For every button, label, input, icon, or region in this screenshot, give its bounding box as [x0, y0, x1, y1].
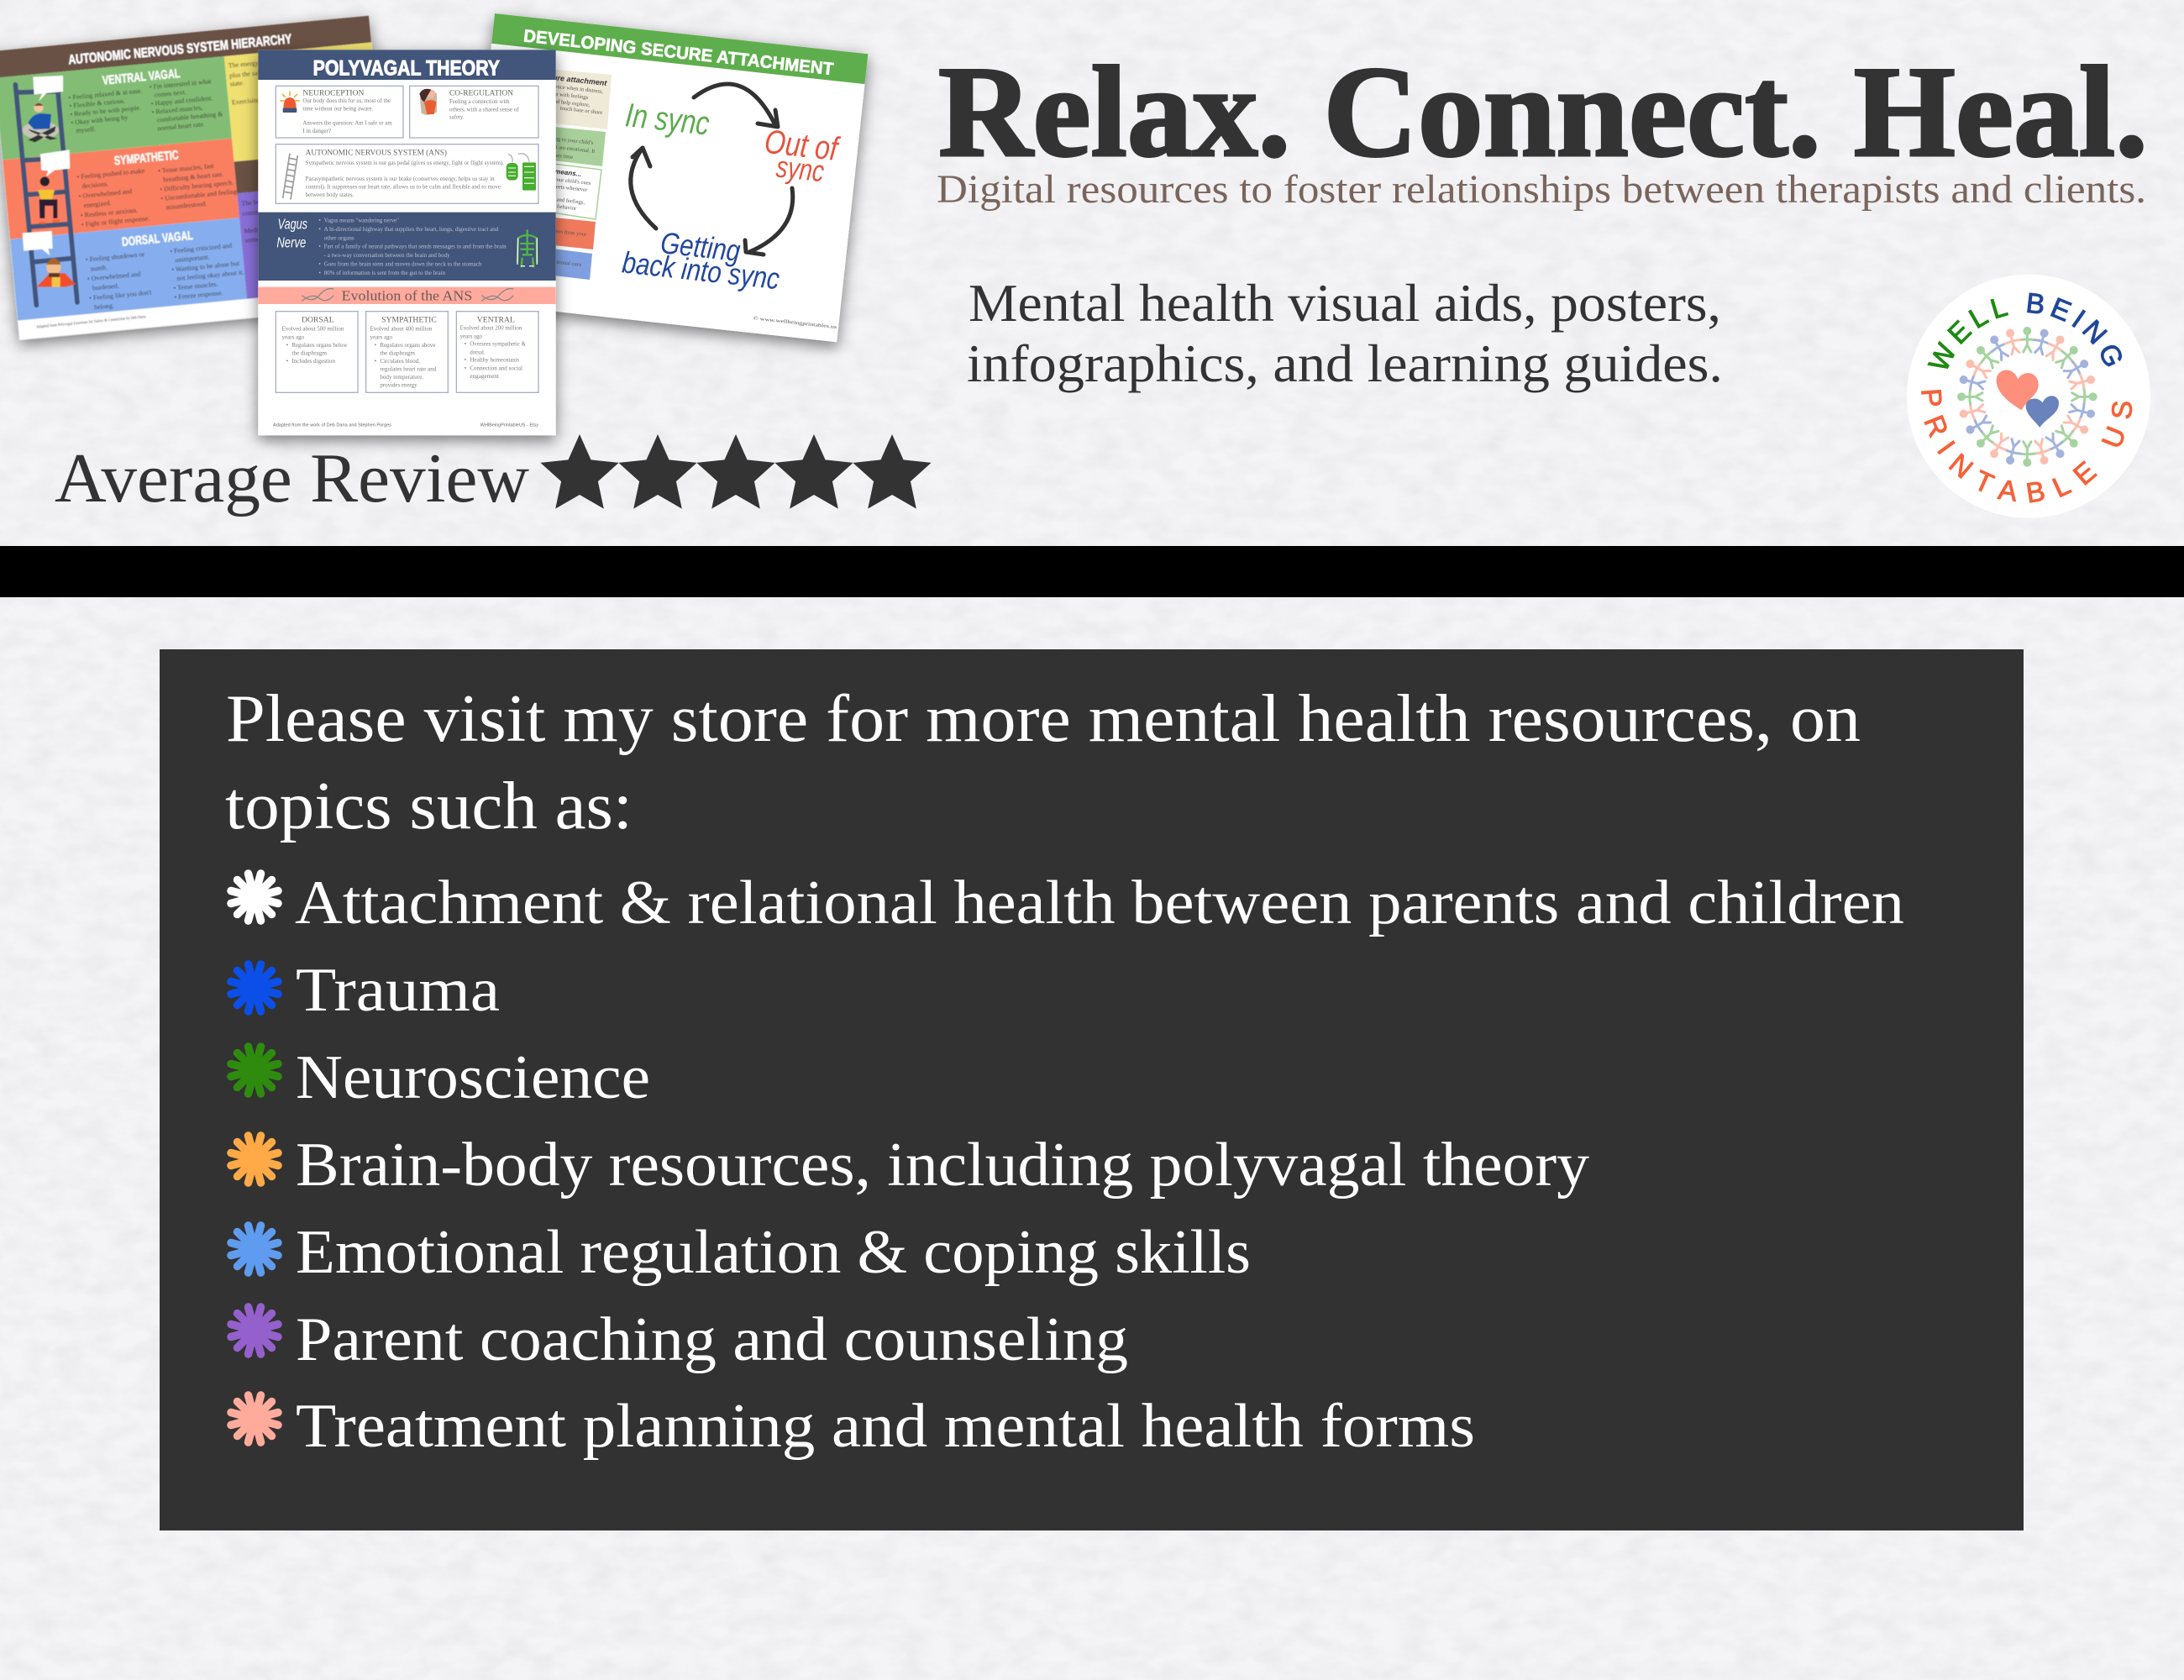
side boxes: Seeing your child's cues [538, 175, 591, 186]
ventral box: VENTRAL [477, 315, 515, 324]
poster: autonomic nervous system hierarchy: • Happy and confident. [150, 94, 213, 108]
side boxes: needs and feelings, [543, 196, 585, 206]
poster: autonomic nervous system hierarchy [0, 16, 396, 339]
vagus nerve band: A bi-directional highway that supplies the heart, lungs, digestive tract and [324, 225, 499, 233]
sympathetic box: Regulates organs above [380, 341, 435, 349]
poster: developing secure attachment: © www.wellbeingprintables.us [753, 315, 837, 330]
vagus nerve band: other organs [324, 234, 354, 241]
topic: treatment planning: Treatment planning and mental health forms [296, 1392, 1475, 1461]
topic: attachment: Attachment & relational health between parents and children [295, 869, 1904, 937]
hearts [1997, 370, 2059, 428]
autonomic nervous system box [276, 144, 538, 203]
side boxes: responding to your child's [536, 134, 594, 146]
poster: autonomic nervous system hierarchy: energized. [83, 199, 112, 209]
average review label: Average Review [55, 439, 529, 517]
neuroception box: time without our being aware. [302, 105, 373, 113]
poster: autonomic nervous system hierarchy: • Overwhelmed and [87, 270, 141, 283]
vagus nerve band: Vagus means "wandering nerve" [324, 216, 399, 223]
poster: autonomic nervous system hierarchy: plus the safety of a [229, 67, 281, 80]
side boxes: help with feelings [549, 91, 589, 101]
description: infographics, and learning guides. [967, 333, 1723, 393]
side boxes: their behavior [545, 202, 577, 212]
poster header [258, 50, 556, 80]
co-regulation box: Feeling a connection with [449, 97, 510, 105]
subtitle: Digital resources to foster relationships between therapists and clients. [937, 167, 2146, 212]
panel intro text: Please visit my store for more mental health resources, on [226, 682, 1861, 756]
poster: autonomic nervous system hierarchy: comfortable breathing & [156, 110, 224, 123]
poster: autonomic nervous system hierarchy: SYMPATHETIC [113, 148, 180, 168]
dorsal box: Includes digestion [291, 357, 335, 365]
panel intro text [225, 682, 1861, 843]
poster: autonomic nervous system hierarchy: • Overwhelmed and [78, 187, 133, 200]
poster: autonomic nervous system hierarchy: • Feeling pushed to make [76, 167, 145, 181]
side boxes [521, 69, 612, 280]
side boxes: it means... [549, 167, 582, 178]
dorsal box: Evolved about 500 million [282, 325, 344, 333]
side boxes: comes from your [549, 228, 587, 238]
ring of people holding hands [1957, 327, 2097, 467]
autonomic nervous system box: Parasympathetic nervous system is our brake (conserves energy, helps us stay in [306, 175, 495, 182]
poster: autonomic nervous system hierarchy: • Relaxed muscles, [151, 103, 203, 116]
poster: autonomic nervous system hierarchy: breathing & heart rate. [163, 171, 224, 184]
neuroception box: I in danger? [302, 127, 331, 134]
circular wordmark: WELL BEING [1927, 292, 2122, 369]
poster: autonomic nervous system hierarchy: • Restless or anxious. [80, 207, 139, 219]
vagus nerve band: Goes from the brain stem and moves down the neck to the stomach [324, 260, 482, 268]
poster: autonomic nervous system hierarchy: normal heart rate. [157, 120, 205, 132]
ventral box: engagement [470, 372, 499, 380]
poster: autonomic nervous system hierarchy: AUTONOMIC NERVOUS SYSTEM HIERARCHY [68, 32, 292, 68]
side boxes: touch base or share [559, 106, 603, 116]
poster: autonomic nervous system hierarchy: DORSAL VAGAL [121, 228, 194, 249]
autonomic nervous system box: between body states. [306, 191, 354, 198]
poster: autonomic nervous system hierarchy: • Feeling shutdown or [85, 250, 145, 264]
evolution of the ANS heading [258, 287, 556, 304]
sympathetic box: body temperature, [380, 373, 423, 381]
poster header: POLYVAGAL THEORY [313, 57, 500, 80]
poster: autonomic nervous system hierarchy: • Difficulty hearing speech. [160, 179, 234, 193]
poster: autonomic nervous system hierarchy: something [244, 234, 273, 244]
poster: autonomic nervous system hierarchy: burdened. [92, 282, 119, 292]
poster: autonomic nervous system hierarchy: numb. [90, 264, 108, 273]
autonomic nervous system box: AUTONOMIC NERVOUS SYSTEM (ANS) [306, 149, 447, 158]
dorsal box: • [286, 357, 289, 365]
poster: autonomic nervous system hierarchy: communicates [242, 207, 281, 218]
panel: store topics [160, 649, 2024, 1530]
topic: neuroscience: Neuroscience [296, 1043, 650, 1112]
poster: developing secure attachment: Getting [659, 225, 742, 268]
sympathetic box: Circulates blood, [380, 357, 420, 365]
dorsal box [276, 312, 358, 392]
ventral box: • [465, 364, 467, 371]
side boxes: Offer your presence when in distress, [521, 80, 604, 95]
side boxes: emotional cues [548, 259, 582, 268]
dorsal box: the diaphragm [291, 349, 327, 356]
poster: developing secure attachment: Out of [763, 123, 842, 168]
sympathetic box: regulates heart rate and [380, 365, 437, 373]
poster: autonomic nervous system hierarchy: unimportant. [175, 253, 210, 264]
co-regulation box: others, with a shared sense of [449, 105, 519, 113]
poster: autonomic nervous system hierarchy: • Flexible & curious. [69, 97, 125, 110]
ventral box [456, 312, 538, 392]
topic: parent coaching: Parent coaching and counseling [296, 1305, 1128, 1374]
poster footer [273, 423, 538, 428]
poster: developing secure attachment: sync [774, 149, 826, 188]
neuroception box: NEUROCEPTION [302, 88, 364, 97]
ladder with three figures [15, 76, 77, 305]
circular wordmark [1921, 292, 2132, 503]
poster: autonomic nervous system hierarchy: Meditation [244, 224, 274, 235]
description [967, 273, 1723, 393]
poster: autonomic nervous system hierarchy: comes next. [154, 88, 186, 99]
poster: autonomic nervous system hierarchy: • Ready to be with people. [70, 104, 141, 118]
poster: autonomic nervous system hierarchy: myself. [76, 125, 96, 134]
evolution of the ANS heading: Evolution of the ANS [342, 287, 472, 303]
dorsal box: years ago [282, 333, 304, 340]
poster: developing secure attachment: back into sync [621, 244, 781, 296]
poster: autonomic nervous system hierarchy: • I'm interested in what [149, 77, 213, 91]
sympathetic box: years ago [370, 333, 392, 340]
poster: autonomic nervous system hierarchy: • Feeling criticized and [170, 242, 233, 255]
co-regulation box [410, 86, 538, 138]
circular wordmark: PRINTABLE US [1921, 390, 2132, 503]
vagus nerve band: - a two-way conversation between the brain and body [324, 251, 450, 259]
panel intro text: topics such as: [225, 769, 633, 843]
side boxes: and meets whenever [542, 182, 588, 193]
black divider band [0, 546, 2184, 597]
sympathetic box [366, 312, 448, 392]
neuroception box: Our body does this for us, most of the [302, 97, 391, 104]
ventral box: Evolved about 200 million [460, 324, 522, 332]
poster: autonomic nervous system hierarchy: • Tense muscles. [173, 281, 218, 291]
sympathetic box: provides energy [380, 381, 417, 389]
vagus nerve band: Nerve [276, 234, 306, 250]
description: Mental health visual aids, posters, [969, 273, 1721, 333]
sympathetic box: • [375, 341, 377, 349]
ventral box: Oversees sympathetic & [470, 340, 526, 348]
ventral box: Connection and social [470, 364, 522, 371]
poster: autonomic nervous system hierarchy: • Okay with being by [71, 113, 129, 127]
autonomic nervous system box: Sympathetic nervous system is our gas pedal (gives us energy, fight or flight system). [306, 159, 504, 166]
topic: emotional regulation: Emotional regulation & coping skills [296, 1218, 1251, 1287]
sympathetic box: Evolved about 400 million [370, 325, 433, 333]
vagus nerve band: • [318, 216, 321, 223]
poster: autonomic nervous system hierarchy: • Freeze response. [174, 289, 223, 301]
poster: autonomic nervous system hierarchy: belong. [94, 302, 114, 311]
poster: autonomic nervous system hierarchy: decisions. [81, 180, 109, 190]
poster footer: WellBeingPrintableUS - Etsy [480, 423, 538, 428]
five star rating [540, 434, 932, 509]
poster: autonomic nervous system hierarchy: VENTRAL VAGAL [102, 66, 181, 88]
poster: autonomic nervous system hierarchy: Exercising [232, 96, 260, 106]
cycle arrows [631, 84, 793, 255]
side boxes: and help explore, [551, 98, 591, 108]
vagus nerve band: Part of a family of neural pathways that sends messages to and from the brain [324, 243, 507, 250]
neuroception box [276, 86, 403, 138]
topic: trauma: Trauma [296, 956, 500, 1025]
dorsal box: DORSAL [302, 315, 334, 324]
dorsal box: Regulates organs below [291, 341, 348, 349]
co-regulation box: safety. [449, 113, 464, 121]
side boxes: takes time [550, 152, 574, 160]
poster: autonomic nervous system hierarchy: The body [241, 197, 267, 207]
poster: polyvagal theory [258, 50, 556, 435]
sympathetic box: SYMPATHETIC [381, 315, 437, 324]
ventral box: • [465, 356, 467, 364]
poster: autonomic nervous system hierarchy: state. [230, 79, 244, 88]
poster: developing secure attachment: In sync [623, 97, 711, 143]
vagus nerve band: • [318, 225, 321, 233]
ventral box: Healthy homeostasis [470, 356, 519, 364]
vagus nerve band: • [318, 260, 321, 268]
neuroception box: Answers the question: Am I safe or am [302, 118, 392, 126]
poster: autonomic nervous system hierarchy: • Uncomfortable and feeling [160, 187, 237, 202]
vagus nerve band: Vagus [278, 215, 307, 232]
ventral box: years ago [460, 332, 482, 339]
vagus nerve band: • [318, 243, 321, 250]
autonomic nervous system box: control). It suppresses our heart rate, allows us to be calm and flexible and to move [306, 182, 501, 190]
poster: autonomic nervous system hierarchy: Adapted from Polyvagal Exercises for Safety & Connection by Deb Dana [36, 315, 147, 330]
sympathetic box: the diaphragm [380, 349, 415, 356]
poster: developing secure attachment [464, 13, 868, 342]
poster: autonomic nervous system hierarchy: • Fight or flight response. [81, 214, 150, 228]
poster: autonomic nervous system hierarchy: The energy of ventral [228, 56, 287, 70]
vagus nerve band: 80% of information is sent from the gut to the brain [324, 269, 445, 276]
ventral box: • [465, 340, 467, 348]
poster: autonomic nervous system hierarchy: • Feeling like you don't [89, 288, 152, 302]
side boxes: secure attachment [540, 71, 608, 87]
sympathetic box: • [375, 357, 377, 365]
poster: developing secure attachment: DEVELOPING SECURE ATTACHMENT [522, 26, 835, 79]
poster: autonomic nervous system hierarchy: • Feeling relaxed & at ease. [68, 87, 143, 102]
side boxes: needs that are emotional. It [535, 142, 596, 155]
co-regulation box: CO-REGULATION [449, 88, 513, 97]
dorsal box: • [286, 341, 289, 349]
poster: autonomic nervous system hierarchy: • Tense muscles, fast [158, 162, 215, 175]
ventral box: dorsal. [470, 348, 486, 355]
vagus nerve band: • [318, 269, 321, 276]
vagus nerve band [258, 213, 556, 281]
poster: autonomic nervous system hierarchy: misunderstood. [165, 200, 207, 211]
topic: brain-body: Brain-body resources, including polyvagal theory [296, 1131, 1589, 1200]
poster footer: Adapted from the work of Deb Dana and Stephen Porges [273, 423, 391, 428]
logo: well being printable us [1907, 274, 2150, 517]
poster: autonomic nervous system hierarchy: not feeling okay about it. [176, 269, 244, 282]
poster: autonomic nervous system hierarchy: • Wanting to be alone but [171, 260, 240, 274]
title: Relax. Connect. Heal. [938, 39, 2148, 184]
